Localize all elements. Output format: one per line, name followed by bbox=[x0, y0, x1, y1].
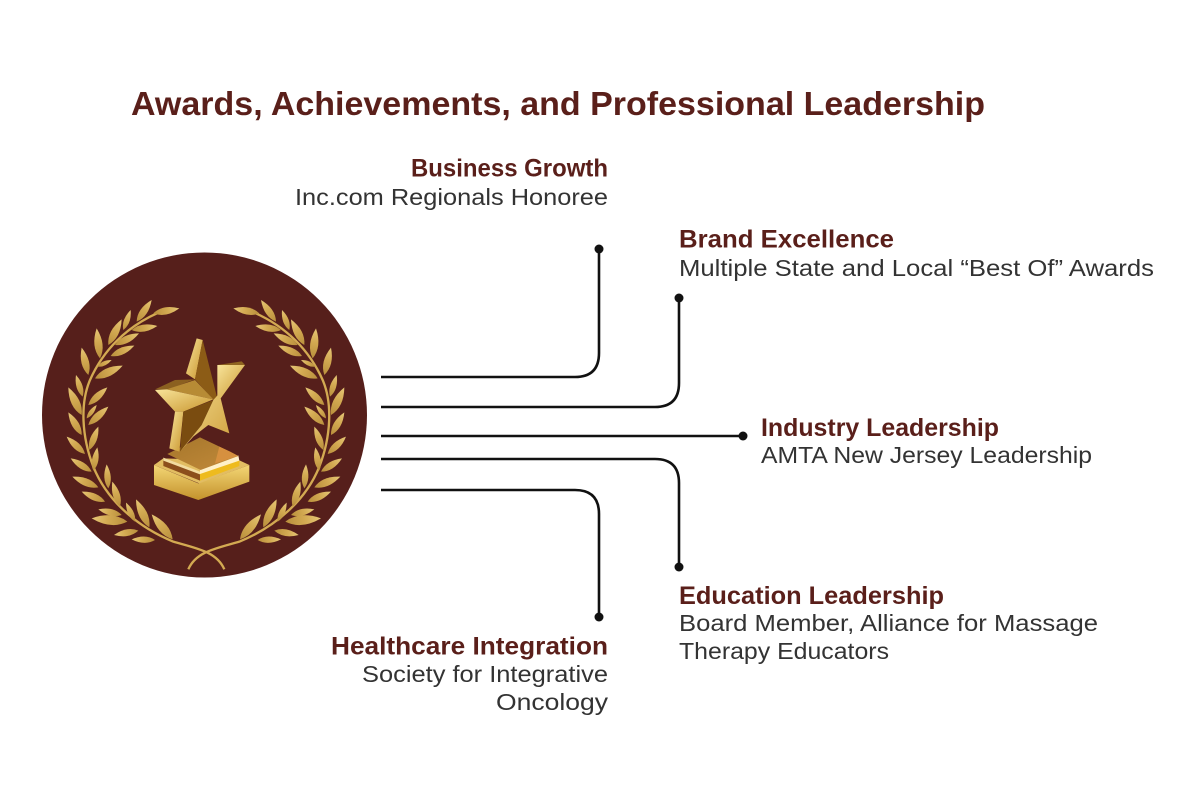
text: education leadership: Therapy Educators bbox=[679, 638, 889, 664]
medallion background circle bbox=[42, 252, 367, 578]
text: business growth: Business Growth bbox=[411, 154, 608, 182]
connector: industry leadership bbox=[381, 432, 748, 440]
text: healthcare integration: Healthcare Integration bbox=[331, 632, 608, 660]
connector: healthcare integration bbox=[381, 490, 604, 622]
text: brand excellence: Multiple State and Local “Best Of” Awards bbox=[679, 255, 1154, 281]
text: business growth: Inc.com Regionals Honoree bbox=[295, 184, 608, 210]
laurel wreath bbox=[64, 298, 348, 569]
connector: business growth bbox=[381, 244, 604, 377]
star trophy bbox=[154, 338, 249, 500]
text: education leadership: Education Leadership bbox=[679, 582, 944, 610]
connector: education leadership bbox=[381, 459, 684, 572]
text: education leadership bbox=[679, 582, 1098, 664]
connector: brand excellence bbox=[381, 294, 684, 407]
text: healthcare integration bbox=[331, 632, 609, 715]
title: Awards, Achievements, and Professional Leadership bbox=[131, 85, 985, 122]
text: healthcare integration: Oncology bbox=[496, 689, 609, 715]
text: industry leadership: Industry Leadership bbox=[761, 414, 999, 442]
text: healthcare integration: Society for Integrative bbox=[362, 661, 608, 687]
text: brand excellence: Brand Excellence bbox=[679, 226, 894, 254]
icon: award medallion bbox=[42, 252, 367, 578]
text: education leadership: Board Member, Alliance for Massage bbox=[679, 610, 1098, 636]
text: business growth bbox=[295, 154, 608, 210]
text: brand excellence bbox=[679, 226, 1154, 281]
text: industry leadership: AMTA New Jersey Leadership bbox=[761, 442, 1092, 468]
text: industry leadership bbox=[761, 414, 1092, 468]
